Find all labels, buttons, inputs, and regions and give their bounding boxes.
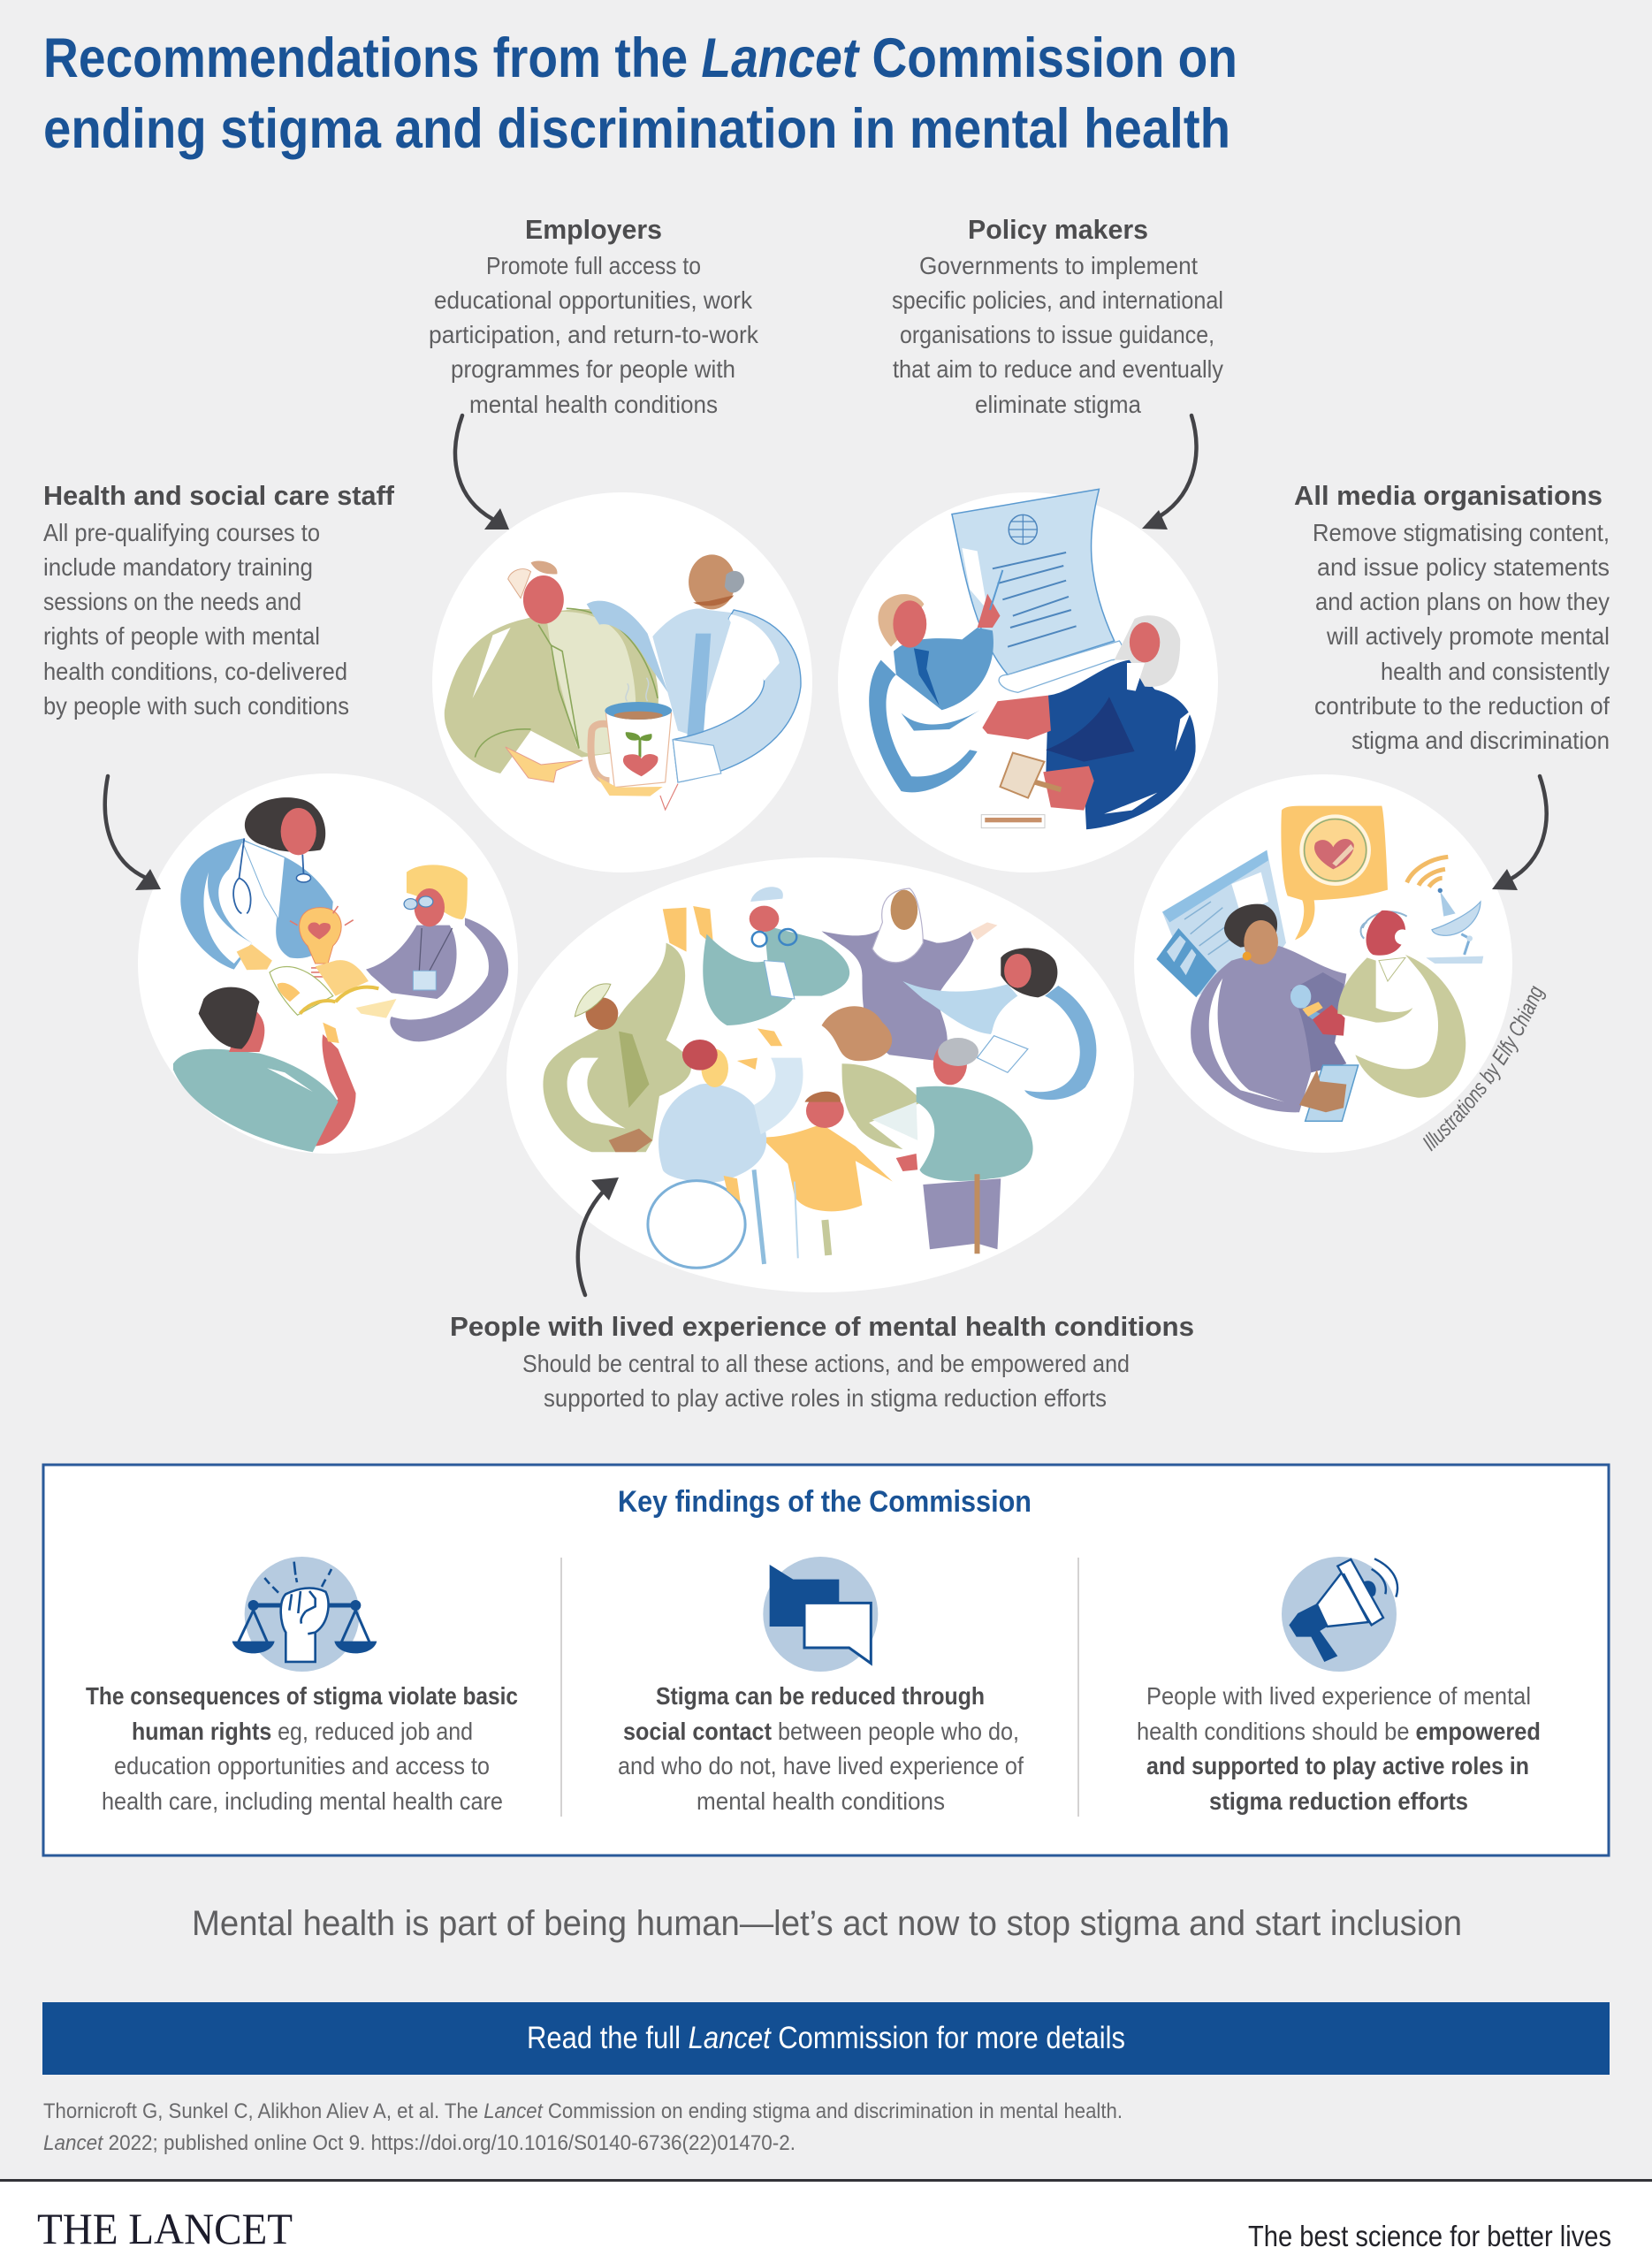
text block: health and social care staff: include mandatory training <box>43 553 313 581</box>
figure: patient seen from behind <box>173 987 356 1152</box>
text block: all media organisations: contribute to the reduction of <box>1314 692 1610 720</box>
text block: people with lived experience: supported to play active roles in stigma reduction efforts <box>544 1384 1107 1412</box>
figure: man in blue shirt <box>587 554 801 782</box>
tagline: best science: The best science for better lives <box>1248 2220 1611 2252</box>
citation <box>43 2099 1123 2155</box>
figure: woman with tan hair <box>822 1006 923 1149</box>
figure: woman with lanyard <box>356 865 508 1041</box>
text block: employers <box>429 214 759 418</box>
text: finding 3: People with lived experience of mental <box>1146 1682 1531 1710</box>
icon: coffee mug with heart <box>590 678 678 810</box>
figure: wheelchair user <box>648 1028 803 1268</box>
heading: key findings: Key findings of the Commission <box>618 1485 1032 1519</box>
panel: health and social care illustration <box>138 773 518 1154</box>
text block: policy makers: Governments to implement <box>919 252 1198 279</box>
logo: the lancet: THE LANCET <box>37 2204 293 2253</box>
text block: policy makers: specific policies, and international <box>892 286 1223 314</box>
text block: all media organisations: will actively promote mental <box>1326 622 1610 650</box>
icon: tablet in hand <box>1299 1065 1359 1121</box>
text block: people with lived experience: Should be central to all these actions, and be empowered and <box>522 1350 1130 1377</box>
text: finding 1: education opportunities and access to <box>114 1752 490 1779</box>
text block: policy makers: Policy makers <box>968 214 1148 245</box>
figure: interviewee in olive <box>1337 911 1465 1098</box>
text block: health and social care staff: rights of people with mental <box>43 622 320 650</box>
illustration credit: Illustrations by Elfy Chiang <box>1423 985 1547 1151</box>
icon: speech bubbles <box>763 1557 878 1672</box>
text: finding 1: human rights eg, reduced job and <box>132 1718 473 1745</box>
banner: call to action <box>42 2002 1610 2075</box>
text: finding 2 <box>618 1682 1024 1815</box>
tagline: Mental health is part of being human—let’s act now to stop stigma and start inclusion <box>192 1904 1462 1943</box>
figure: doctor with clipboard <box>902 948 1096 1100</box>
citation: Lancet 2022; published online Oct 9. https://doi.org/10.1016/S0140-6736(22)01470-2. <box>43 2131 796 2155</box>
text block: employers: participation, and return-to-work <box>429 321 759 348</box>
text block: health and social care staff: by people with such conditions <box>43 692 349 720</box>
text block: policy makers <box>892 214 1223 418</box>
text block: policy makers: eliminate stigma <box>975 391 1141 418</box>
figure: elder with cane <box>872 1038 1033 1253</box>
title: ending stigma and discrimination in mental health <box>43 98 1230 160</box>
arrow: policy makers <box>1142 415 1197 530</box>
icon: speech bubble with heart <box>1281 806 1388 940</box>
panel: people with lived experience illustration <box>506 857 1134 1292</box>
text block: all media organisations: Remove stigmatising content, <box>1313 519 1610 546</box>
text block: all media organisations: health and consistently <box>1381 658 1610 685</box>
text block: employers: educational opportunities, work <box>434 286 753 314</box>
text block: health and social care staff: health conditions, co-delivered <box>43 658 347 685</box>
text: finding 3: health conditions should be empowered <box>1137 1718 1541 1745</box>
panel: employers illustration <box>432 492 812 872</box>
text block: health and social care staff: sessions on the needs and <box>43 588 301 615</box>
icon: satellite dish <box>1407 857 1483 964</box>
title: Recommendations from the Lancet Commission on <box>43 27 1237 89</box>
panel: policy makers illustration <box>838 489 1218 872</box>
figure: judge in robe and wig <box>1043 615 1196 829</box>
footer <box>0 2179 1652 2263</box>
arrow: people with lived experience <box>578 1177 619 1295</box>
text block: health and social care staff: All pre-qualifying courses to <box>43 519 320 546</box>
text block: all media organisations: stigma and discrimination <box>1351 727 1610 754</box>
figure: man in hat <box>543 906 713 1152</box>
text: finding 3 <box>1137 1682 1541 1815</box>
icon: handshake <box>982 696 1051 740</box>
text block: people with lived experience: People with lived experience of mental health conditions <box>450 1311 1194 1342</box>
text block: people with lived experience <box>450 1311 1194 1412</box>
panel: media organisations illustration <box>1134 774 1512 1153</box>
text block: employers: Promote full access to <box>486 252 701 279</box>
figure: interviewer in purple <box>1191 904 1346 1112</box>
icon: scroll document with globe <box>952 489 1123 692</box>
arrow: health and social care staff <box>105 776 161 890</box>
text: finding 2: Stigma can be reduced through <box>656 1682 985 1710</box>
text: finding 1 <box>86 1682 518 1815</box>
banner: call to action: Read the full Lancet Commission for more details <box>527 2021 1125 2055</box>
icon: open book <box>270 960 378 1015</box>
text: finding 3: stigma reduction efforts <box>1209 1787 1468 1815</box>
text block: policy makers: organisations to issue guidance, <box>900 321 1214 348</box>
text block: employers: mental health conditions <box>469 391 718 418</box>
icon: lightbulb with heart <box>290 906 354 977</box>
arrow: employers <box>455 415 509 530</box>
title <box>43 27 1237 160</box>
text: finding 2: social contact between people who do, <box>623 1718 1019 1745</box>
figure: child in yellow <box>761 1092 917 1255</box>
figure: politician in blue suit <box>869 570 1002 792</box>
figure: woman in hijab <box>822 888 997 1061</box>
text: finding 3: and supported to play active roles in <box>1146 1752 1529 1779</box>
text block: all media organisations: and action plans on how they <box>1315 588 1610 615</box>
text block: employers: programmes for people with <box>451 355 735 383</box>
text: finding 2: and who do not, have lived experience of <box>618 1752 1024 1779</box>
panel: key findings <box>43 1465 1609 1855</box>
text block: all media organisations: and issue policy statements <box>1317 553 1610 581</box>
icon: gavel and block <box>981 753 1061 828</box>
arrow: media <box>1492 776 1547 890</box>
text block: employers: Employers <box>525 214 662 245</box>
text block: health and social care staff: Health and social care staff <box>43 480 395 511</box>
figure: person with cap and headphones <box>703 887 849 1025</box>
figure: doctor with stethoscope <box>180 797 333 970</box>
text block: policy makers: that aim to reduce and eventually <box>893 355 1223 383</box>
icon: fist and scales <box>232 1557 377 1672</box>
icon: web pages <box>1156 850 1286 997</box>
icon: megaphone <box>1282 1557 1397 1672</box>
text block: all media organisations: All media organisations <box>1294 480 1603 511</box>
text: finding 1: The consequences of stigma violate basic <box>86 1682 518 1710</box>
text block: health and social care staff <box>43 480 395 720</box>
figure: man in olive jumper <box>445 560 659 782</box>
citation: Thornicroft G, Sunkel C, Alikhon Aliev A, et al. The Lancet Commission on ending stigma and discrimination in mental health. <box>43 2099 1123 2123</box>
text: finding 2: mental health conditions <box>697 1787 945 1815</box>
text: finding 1: health care, including mental health care <box>102 1787 503 1815</box>
text block: all media organisations <box>1294 480 1610 754</box>
